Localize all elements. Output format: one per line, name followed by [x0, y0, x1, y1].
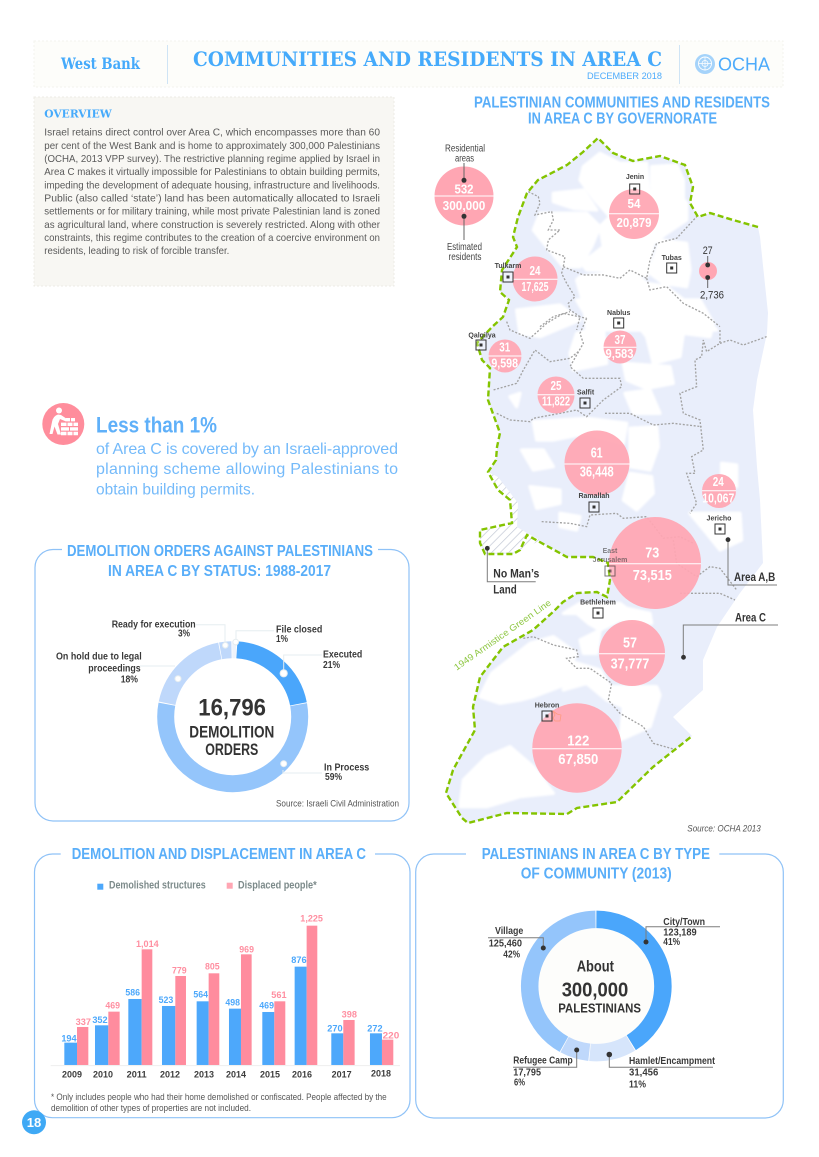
overview text: Israel retains direct control over Area C, which encompasses more than 60	[44, 127, 380, 139]
overview text: residents, leading to risk of forcible transfer.	[44, 245, 229, 257]
donut labels	[489, 916, 715, 1090]
bubble: Jericho	[702, 474, 736, 508]
bar values: demolished: 194	[61, 1033, 77, 1043]
legend annotation: estimated residents: Estimated	[447, 242, 482, 253]
year axis: 2012	[160, 1069, 180, 1079]
town: Qalqilya: Qalqilya	[468, 332, 496, 340]
governorate boundaries	[493, 192, 767, 750]
donut labels: 1%	[276, 633, 289, 645]
donut labels: City/Town	[663, 916, 705, 928]
town: Hebron: Hebron	[535, 702, 559, 710]
bubble: Tubas: 27	[703, 245, 713, 257]
bubble: Jenin: 54	[628, 197, 641, 211]
page number: 18	[27, 1115, 41, 1130]
donut labels: 3%	[178, 628, 191, 640]
overview heading: OVERVIEW	[44, 107, 113, 121]
panel title: IN AREA C BY STATUS: 1988-2017	[108, 563, 331, 580]
bubble: Jerusalem: 73,515	[633, 568, 672, 584]
donut labels: 17,795	[513, 1067, 541, 1079]
panel: demolition orders	[35, 543, 409, 821]
bubble: Tulkarm	[512, 256, 558, 302]
town markers	[468, 174, 731, 721]
page number	[22, 1110, 46, 1134]
year axis: 2011	[127, 1069, 147, 1079]
panel title: DEMOLITION ORDERS AGAINST PALESTINIANS	[67, 543, 373, 560]
donut labels: 41%	[663, 936, 681, 948]
annotation: no man's land	[485, 546, 540, 596]
icon: builder laying bricks	[42, 403, 84, 445]
bubble: Jericho: 24	[713, 475, 724, 489]
bubble: Qalqilya: 9,598	[491, 356, 518, 370]
town: Tulkarm: Tulkarm	[495, 263, 521, 270]
panel title: OF COMMUNITY (2013)	[521, 866, 672, 883]
overview text: Area C makes it virtually impossible for Palestinians to obtain building permits,	[44, 166, 380, 178]
year axis: 2009	[62, 1069, 82, 1079]
bubble: Hebron	[532, 703, 622, 793]
bubble: Jericho: 10,067	[702, 491, 734, 505]
panel title	[67, 543, 373, 580]
donut chart: community type	[505, 895, 687, 1077]
bar chart	[51, 914, 400, 1079]
bar values: displaced: 1,225	[300, 914, 323, 924]
donut centre label: About	[577, 959, 614, 976]
town: Qalqilya	[468, 332, 496, 350]
town: Tubas: Tubas	[662, 255, 682, 262]
bar values: demolished: 352	[92, 1015, 108, 1025]
bar values: displaced: 469	[105, 1001, 120, 1011]
year axis: 2018	[371, 1068, 391, 1078]
title: COMMUNITIES AND RESIDENTS IN AREA C	[193, 47, 662, 71]
footnote: demolition of other types of properties are not included.	[51, 1103, 251, 1114]
town: Nablus	[607, 310, 630, 328]
bubble: Nablus	[604, 330, 636, 364]
town: East Jerusalem: Jerusalem	[593, 557, 627, 564]
bar values: displaced: 805	[205, 962, 220, 972]
donut chart: status	[153, 637, 312, 796]
legend annotation: residential areas: Residential	[445, 144, 485, 155]
donut labels: Village	[495, 925, 523, 937]
donut labels: 59%	[325, 771, 343, 783]
bubble: Ramallah: 36,448	[580, 465, 614, 481]
areas A and B	[460, 153, 742, 807]
donut markers	[175, 639, 287, 767]
footnote	[51, 1092, 387, 1114]
donut labels: 31,456	[629, 1067, 658, 1079]
donut labels: Refugee Camp	[513, 1054, 573, 1066]
year axis: 2010	[93, 1069, 113, 1079]
annotation: area C	[681, 611, 778, 660]
town: Bethlehem: Bethlehem	[580, 600, 616, 606]
donut centre label	[189, 695, 274, 759]
legend annotation: residential areas: areas	[455, 154, 474, 165]
bubble: Bethlehem: 57	[623, 635, 637, 651]
map source: Source: OCHA 2013	[687, 824, 761, 835]
bars: demolished structures	[64, 967, 382, 1065]
town: Tubas	[662, 255, 682, 273]
callout text: of Area C is covered by an Israeli-approved	[96, 441, 398, 458]
bar values: demolished: 523	[159, 995, 173, 1005]
OCHA logo: OCHA	[718, 54, 770, 74]
bubble: Hebron: 67,850	[558, 752, 598, 768]
bar values: displaced: 1,014	[136, 939, 159, 949]
town: Tulkarm	[495, 263, 521, 282]
donut labels: Ready for execution	[112, 619, 196, 631]
bubble: Jerusalem	[609, 517, 701, 609]
panel title: DEMOLITION AND DISPLACEMENT IN AREA C	[72, 846, 366, 863]
bar values: displaced: 779	[172, 966, 187, 976]
donut centre label: ORDERS	[205, 741, 258, 759]
donut labels: 18%	[121, 674, 139, 686]
panel: community type	[416, 846, 783, 1118]
town: Bethlehem	[580, 600, 616, 618]
bubble: Bethlehem: 37,777	[611, 656, 649, 672]
1949 green line	[446, 138, 758, 823]
town: Ramallah	[578, 493, 610, 512]
legend annotation: estimated residents	[447, 214, 482, 263]
bubble: Qalqilya	[488, 340, 522, 372]
bubble: Jerusalem: 73	[645, 546, 659, 562]
panel: overview	[34, 97, 394, 286]
overview text: constraints, this regime contributes to the creation of a coercive environment on	[44, 232, 380, 244]
bubble: Tubas: 2,736	[700, 290, 724, 302]
overview text: per cent of the West Bank and is home to approximately 300,000 Palestinians	[44, 140, 380, 152]
bubble: Salfit: 11,822	[542, 395, 570, 409]
town: Salfit	[577, 390, 595, 408]
bar values: demolished: 876	[291, 955, 307, 965]
no man's land hatch	[480, 472, 540, 553]
annotation: area C: Area C	[735, 611, 766, 625]
bar values: displaced	[76, 914, 399, 1041]
bar values: demolished: 498	[225, 998, 240, 1008]
overview text	[44, 127, 380, 257]
bar values: demolished: 469	[259, 1001, 274, 1011]
chart legend: Displaced people*	[238, 880, 317, 892]
bubble: Salfit: 25	[550, 379, 562, 393]
legend annotation: estimated residents: residents	[448, 252, 482, 263]
donut labels: File closed	[276, 624, 322, 636]
bar values: demolished: 270	[327, 1024, 343, 1034]
annotation: no man's land: No Man’s	[493, 567, 540, 581]
bubble: Bethlehem	[599, 620, 665, 686]
bubble: Hebron: 122	[567, 733, 589, 749]
overview text: (OCHA, 2013 VPP survey). The restrictive planning regime applied by Israel in	[44, 153, 380, 165]
donut leader lines	[488, 927, 720, 1067]
town: Nablus: Nablus	[607, 310, 630, 317]
bubble: Nablus: 37	[614, 333, 626, 347]
bar values: displaced: 969	[239, 945, 254, 955]
bar values: demolished: 272	[367, 1024, 383, 1034]
town: East Jerusalem: East	[603, 548, 618, 555]
bubble: Jenin	[609, 189, 659, 239]
bubble: legend 532 / 300,000	[434, 166, 494, 226]
year axis: 2017	[332, 1069, 352, 1079]
overview text: settlements or for military training, while most private Palestinian land is zoned	[44, 206, 380, 218]
donut labels: On hold due to legal	[56, 651, 142, 663]
donut labels: 11%	[629, 1078, 647, 1090]
annotation: area A,B: Area A,B	[734, 570, 776, 584]
town: Jenin: Jenin	[626, 174, 644, 181]
legend annotation: residential areas	[445, 144, 485, 183]
callout heading: Less than 1%	[96, 413, 217, 438]
donut labels: 21%	[323, 659, 341, 671]
bar values: displaced: 398	[342, 1010, 357, 1020]
overview text: impeding the development of adequate housing, infrastructure and livelihoods.	[44, 179, 380, 191]
donut centre label: DEMOLITION	[189, 723, 274, 741]
year axis: 2016	[292, 1069, 312, 1079]
town: Jenin	[626, 174, 644, 194]
panel title	[482, 846, 710, 883]
map land area C	[446, 138, 768, 823]
bar values: displaced: 337	[76, 1017, 91, 1027]
panel title: PALESTINIANS IN AREA C BY TYPE	[482, 846, 710, 863]
donut leader lines	[140, 625, 322, 773]
town: Salfit: Salfit	[577, 390, 595, 396]
town: Ramallah: Ramallah	[578, 493, 610, 500]
armistice label: 1949 Armistice Green Line	[452, 598, 553, 672]
donut labels: proceedings	[88, 663, 141, 675]
bubble: Tulkarm: 17,625	[522, 280, 549, 294]
town: Hebron	[535, 702, 561, 721]
date: DECEMBER 2018	[587, 71, 662, 82]
donut labels	[56, 619, 369, 783]
donut labels: Executed	[323, 648, 362, 660]
bar values: displaced: 220	[383, 1031, 399, 1041]
bar values: demolished: 586	[125, 988, 140, 998]
year axis: 2013	[194, 1069, 214, 1079]
year axis	[62, 1068, 391, 1079]
bubble: Jenin: 20,879	[616, 216, 652, 230]
chart legend	[97, 880, 317, 892]
region name: West Bank	[60, 54, 140, 73]
bubble: Salfit	[538, 376, 574, 414]
panel: demolition and displacement	[34, 846, 410, 1118]
map title	[474, 95, 770, 128]
annotation: no man's land: Land	[493, 582, 517, 596]
donut labels: 42%	[503, 948, 521, 960]
bubble: Tubas	[699, 245, 724, 302]
donut centre label: 300,000	[562, 980, 628, 1002]
bar values: displaced: 561	[271, 990, 287, 1000]
town: Jericho: Jericho	[707, 516, 731, 522]
donut labels: 6%	[514, 1077, 525, 1089]
bubble: legend 532 / 300,000: 532	[454, 183, 474, 197]
bubble: Ramallah	[564, 430, 630, 496]
overview text: Public (also called ‘state’) land has been automatically allocated to Israeli	[44, 192, 380, 204]
source note: Source: Israeli Civil Administration	[276, 799, 399, 810]
annotation: area A,B	[726, 537, 777, 585]
overview text: as agricultural land, where construction is severely restricted. Along with other	[44, 219, 380, 231]
footnote: * Only includes people who had their home demolished or confiscated. People affected by the	[51, 1092, 387, 1103]
donut labels: 123,189	[663, 927, 697, 939]
OCHA logo	[695, 54, 770, 74]
bar values: demolished	[61, 955, 383, 1043]
bars: displaced people	[77, 926, 393, 1065]
donut labels: In Process	[324, 762, 369, 774]
donut centre label: 16,796	[198, 695, 266, 722]
map: West Bank	[434, 138, 778, 835]
callout text: obtain building permits.	[96, 481, 255, 498]
year axis: 2014	[226, 1069, 247, 1079]
header band	[34, 41, 783, 87]
chart legend: Demolished structures	[109, 880, 206, 892]
bubble: Nablus: 9,583	[606, 347, 634, 361]
bubble: Qalqilya: 31	[499, 341, 510, 355]
donut labels: 125,460	[489, 938, 522, 950]
donut labels: Hamlet/Encampment	[629, 1055, 715, 1067]
bubble: Ramallah: 61	[591, 446, 603, 462]
bar values: demolished: 564	[193, 990, 209, 1000]
town: Jericho	[707, 516, 731, 534]
callout text	[96, 441, 398, 498]
donut centre label	[558, 959, 641, 1015]
town: East Jerusalem	[593, 548, 627, 576]
callout text: planning scheme allowing Palestinians to	[96, 461, 398, 478]
bubble: legend 532 / 300,000: 300,000	[443, 199, 485, 213]
callout: less than 1%	[42, 403, 398, 498]
bubble: Tulkarm: 24	[530, 264, 541, 278]
year axis: 2015	[260, 1069, 280, 1079]
donut centre label: PALESTINIANS	[558, 1001, 641, 1015]
map title: IN AREA C BY GOVERNORATE	[528, 111, 717, 128]
